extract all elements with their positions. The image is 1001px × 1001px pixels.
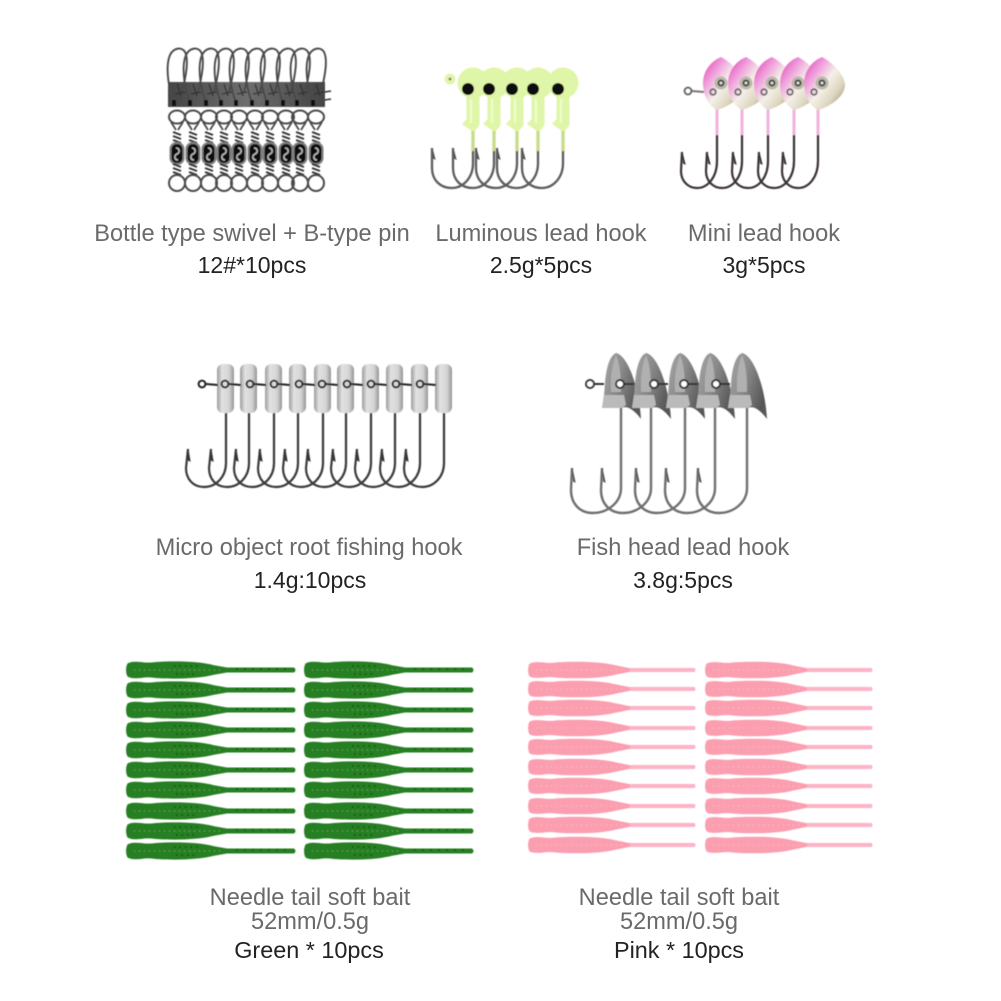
label: luminous hook quantity: 2.5g*5pcs bbox=[490, 252, 592, 278]
panel: swivel and pin bbox=[94, 49, 410, 278]
label: mini hook quantity: 3g*5pcs bbox=[722, 252, 806, 278]
panel: green soft bait bbox=[126, 661, 474, 963]
label: pink bait quantity: Pink * 10pcs bbox=[614, 937, 744, 963]
label: fish head hook quantity: 3.8g:5pcs bbox=[633, 567, 733, 593]
label: fish head hook name: Fish head lead hook bbox=[577, 535, 789, 561]
panel: luminous lead hook bbox=[432, 68, 647, 278]
panel: fish head lead hook bbox=[571, 353, 789, 593]
label: micro hook name: Micro object root fishing hook bbox=[156, 535, 463, 561]
image: pink needle tail baits bbox=[528, 662, 872, 853]
image: micro object root hooks bbox=[186, 364, 452, 487]
image: luminous lead hooks bbox=[432, 68, 578, 188]
image: green needle tail baits bbox=[126, 661, 474, 860]
label: luminous hook name: Luminous lead hook bbox=[435, 221, 647, 247]
panel: mini lead hook bbox=[681, 57, 845, 278]
image: bottle swivels with B-type pins bbox=[168, 49, 331, 191]
panel: pink soft bait bbox=[528, 662, 872, 963]
label: swivel quantity: 12#*10pcs bbox=[198, 252, 306, 278]
label: micro hook quantity: 1.4g:10pcs bbox=[254, 567, 366, 593]
label: green bait size: 52mm/0.5g bbox=[251, 909, 369, 935]
label: pink bait size: 52mm/0.5g bbox=[620, 909, 738, 935]
image: fish head lead hooks bbox=[571, 353, 767, 513]
label: green bait name: Needle tail soft bait bbox=[210, 885, 411, 911]
label: swivel name: Bottle type swivel + B-type pin bbox=[94, 221, 410, 247]
label: mini hook name: Mini lead hook bbox=[688, 221, 840, 247]
label: pink bait name: Needle tail soft bait bbox=[579, 885, 780, 911]
label: green bait quantity: Green * 10pcs bbox=[234, 937, 384, 963]
panel: micro object hook bbox=[156, 364, 463, 593]
image: mini lead hooks bbox=[681, 57, 845, 188]
